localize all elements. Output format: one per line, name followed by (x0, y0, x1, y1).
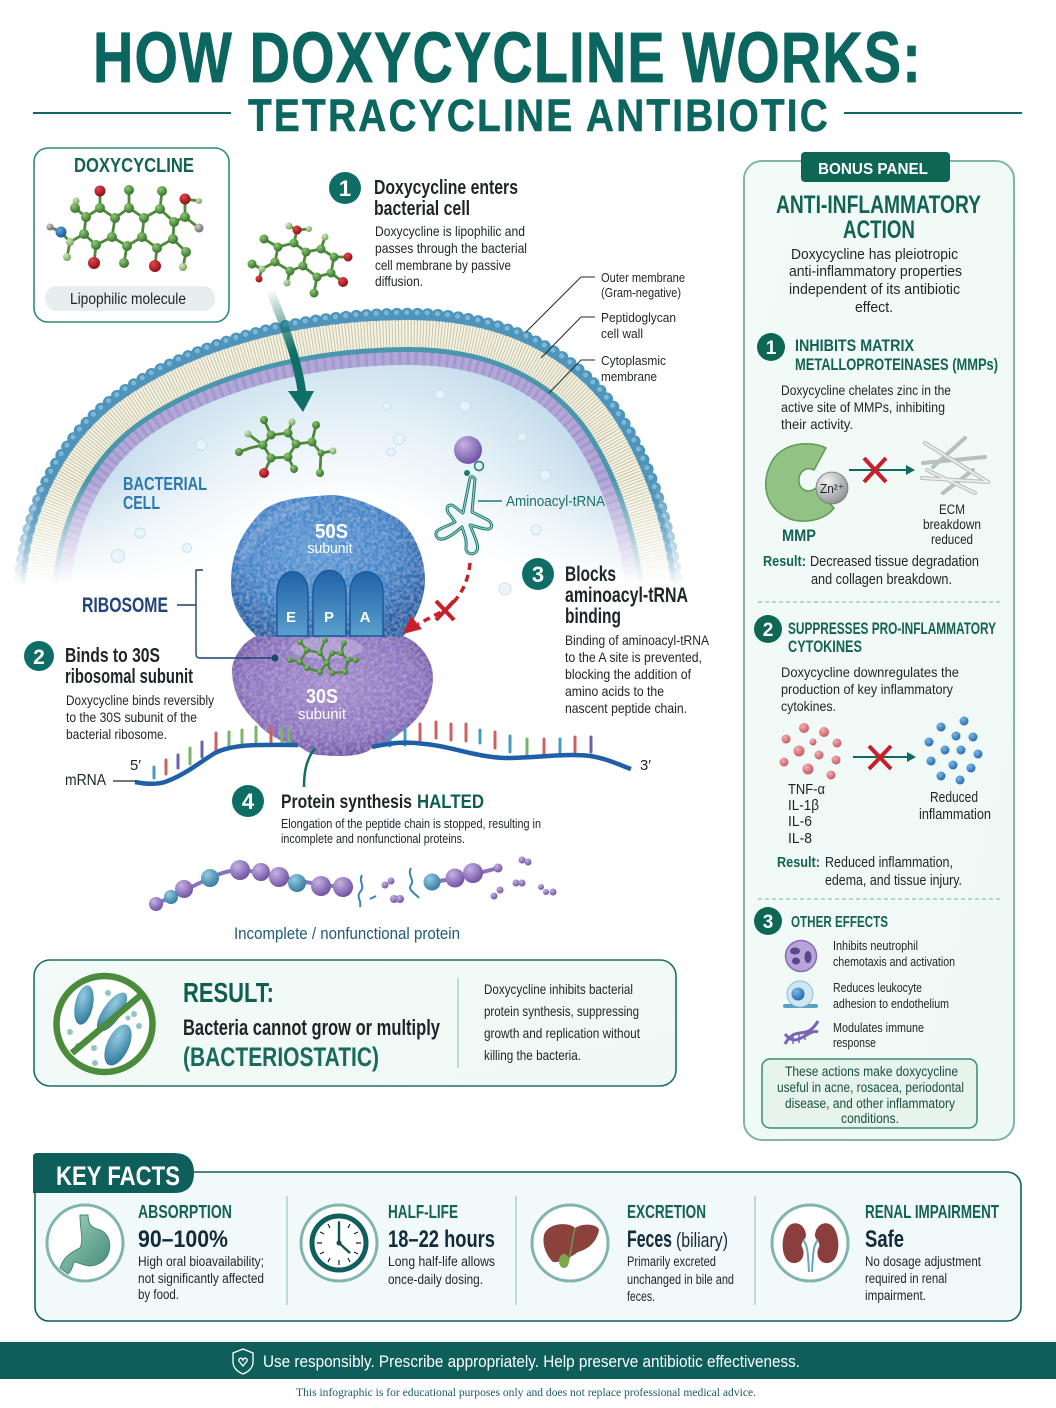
text: MMP result: Decreased tissue degradation (810, 554, 979, 570)
label: reduced inflammation (919, 790, 991, 823)
step 3: blocks aminoacyl-tRNA binding: aminoacyl-tRNA (565, 584, 688, 607)
text: neutrophil effect: Inhibits neutrophil (833, 939, 918, 953)
section 2: suppresses cytokines: CYTOKINES (788, 638, 862, 656)
step 3: blocks aminoacyl-tRNA binding: Binding of aminoacyl-tRNA (565, 632, 710, 648)
fact: half-life: HALF-LIFE (388, 1202, 458, 1222)
chart: incomplete peptide chain (149, 856, 556, 911)
text: result explanation: killing the bacteria. (484, 1047, 581, 1063)
step 1: doxycycline enters bacterial cell: Doxycycline enters (374, 177, 518, 199)
text: immune effect: response (833, 1036, 876, 1050)
step 1: doxycycline enters bacterial cell: diffusion. (375, 273, 423, 289)
icon: reduced cytokines (924, 716, 982, 784)
step 1: doxycycline enters bacterial cell (329, 172, 527, 289)
ribosome: 30S small subunit: subunit (298, 706, 347, 723)
fact: renal impairment: Safe (865, 1226, 904, 1253)
icon: MMP enzyme with zinc (766, 444, 848, 545)
icon: aminoacyl-tRNA (436, 436, 492, 554)
badge: bonus panel (801, 152, 950, 182)
text: MMP result (763, 554, 979, 588)
step 1: doxycycline enters bacterial cell: bacterial cell (374, 198, 470, 220)
label: incomplete protein: Incomplete / nonfunctional protein (234, 924, 460, 943)
label: bacterial cell: BACTERIAL (123, 474, 207, 494)
list: cytokine names: IL-1β (788, 798, 819, 814)
membrane labels with leader lines: cell wall (601, 326, 643, 341)
callout: clinical uses: disease, and other inflammatory (785, 1096, 955, 1111)
section 1: inhibits MMPs (757, 333, 998, 432)
heading: result statement: RESULT: (183, 977, 274, 1008)
fact: renal impairment: impairment. (865, 1288, 926, 1303)
text: result explanation: growth and replication without (484, 1025, 640, 1041)
heading: anti-inflammatory action: ANTI-INFLAMMATORY (776, 191, 981, 219)
icon: leukocyte on endothelium (783, 981, 818, 1008)
fact: half-life: 18–22 hours (388, 1226, 495, 1253)
icon: doxycycline bound in ribosome (287, 637, 359, 676)
section 2: suppresses cytokines: 2 (763, 620, 773, 641)
step 1: doxycycline enters bacterial cell: 1 (339, 176, 351, 201)
text: result explanation (484, 981, 640, 1063)
text: cytokine result: Reduced inflammation, (825, 855, 953, 871)
label: reduced inflammation: Reduced (930, 790, 978, 806)
step 2: binds to 30S ribosomal subunit: to the 30S subunit of the (66, 709, 197, 725)
membrane labels with leader lines: Cytoplasmic (601, 353, 666, 368)
text: responsible use: Use responsibly. Prescribe appropriately. Help preserve antibiotic effectiveness. (263, 1352, 800, 1371)
label: bacterial cell (123, 474, 207, 513)
fact: half-life (388, 1202, 495, 1287)
callout: clinical uses (762, 1059, 977, 1128)
ribosome: 50S large subunit: subunit (308, 540, 353, 557)
icon: neutrophil (786, 940, 816, 972)
text: MMP result: and collagen breakdown. (811, 572, 952, 588)
icon: doxycycline molecule inside cell (235, 416, 336, 478)
icon: doxycycline ball-and-stick (46, 185, 204, 272)
step 4: protein synthesis halted (232, 748, 541, 846)
text: neutrophil effect (833, 939, 955, 969)
badge: lipophilic molecule (45, 286, 215, 311)
step 1: doxycycline enters bacterial cell: Doxycycline is lipophilic and (375, 223, 525, 239)
fact: renal impairment: required in renal (865, 1271, 947, 1286)
badge: bonus panel: BONUS PANEL (818, 161, 928, 178)
icon: liver (532, 1205, 608, 1281)
icon: shield with heart (233, 1349, 253, 1374)
heading: result statement (183, 977, 441, 1072)
membrane labels with leader lines: Outer membrane (601, 270, 685, 285)
list: cytokine names: TNF-α (788, 782, 825, 798)
membrane labels with leader lines (526, 270, 685, 393)
label: mRNA and 5 prime end: 5′ (130, 757, 141, 774)
step 2: binds to 30S ribosomal subunit: ribosomal subunit (65, 665, 193, 688)
label: mRNA and 5 prime end: mRNA (65, 772, 107, 789)
arrow: blocked cytokine production (853, 746, 916, 769)
fact: excretion: feces. (627, 1289, 655, 1304)
icon: doxycycline molecule outside cell (248, 222, 352, 298)
panel: doxycycline molecule (34, 148, 229, 322)
fact: excretion: unchanged in bile and (627, 1272, 734, 1287)
membrane labels with leader lines: (Gram-negative) (601, 285, 681, 300)
ribosome: 50S large subunit: E (286, 609, 296, 626)
label: aminoacyl-tRNA: Aminoacyl-tRNA (506, 494, 605, 510)
icon: ECM fibers (922, 438, 988, 493)
section 1: inhibits MMPs: 1 (766, 338, 777, 359)
step 1: doxycycline enters bacterial cell: cell membrane by passive (375, 257, 511, 273)
step 4: protein synthesis halted: Protein synthesis (281, 791, 412, 813)
text: neutrophil effect: chemotaxis and activation (833, 955, 955, 969)
text: cytokine result (777, 855, 962, 889)
section 3: other effects (754, 907, 888, 935)
heading: anti-inflammatory action (776, 191, 981, 244)
label: ribosome with bracket: RIBOSOME (82, 594, 168, 617)
icon: stomach (47, 1205, 123, 1281)
fact: absorption: by food. (138, 1287, 179, 1302)
section 1: inhibits MMPs: their activity. (781, 416, 853, 432)
text: intro: anti-inflammatory properties (789, 263, 962, 280)
text: cytokine result: Result: (777, 855, 820, 871)
fact: excretion: EXCRETION (627, 1202, 706, 1222)
text: immune effect: Modulates immune (833, 1021, 924, 1035)
callout: clinical uses: These actions make doxycycline (785, 1064, 958, 1079)
text: result explanation: Doxycycline inhibits bacterial (484, 981, 633, 997)
section 1: inhibits MMPs: active site of MMPs, inhibiting (781, 399, 945, 415)
panel: result bacteriostatic (34, 960, 676, 1086)
text: immune effect (833, 1021, 924, 1050)
step 3: blocks aminoacyl-tRNA binding: blocking the addition of (565, 666, 691, 682)
heading: anti-inflammatory action: ACTION (843, 216, 915, 244)
fact: absorption: High oral bioavailability; (138, 1254, 264, 1269)
fact: excretion (627, 1202, 734, 1304)
disclaimer: This infographic is for educational purposes only and does not replace professional medical advice. (296, 1387, 756, 1399)
text: leukocyte effect: Reduces leukocyte (833, 981, 922, 995)
callout: clinical uses: useful in acne, rosacea, periodontal (777, 1080, 964, 1095)
heading: result statement: Bacteria cannot grow or multiply (183, 1015, 441, 1040)
ribosome: 50S large subunit (231, 495, 425, 637)
callout: clinical uses: conditions. (841, 1111, 899, 1126)
step 3: blocks aminoacyl-tRNA binding: binding (565, 605, 621, 628)
ribosome: 50S large subunit: 50S (315, 521, 348, 543)
ribosome: 50S large subunit: P (324, 609, 334, 626)
section 2: suppresses cytokines (754, 615, 996, 714)
text: intro: effect. (855, 299, 893, 316)
arrow: blocked tRNA path (403, 563, 470, 634)
heading: doxycycline: DOXYCYCLINE (74, 155, 194, 177)
fact: absorption (138, 1202, 264, 1302)
section 2: suppresses cytokines: Doxycycline downregulates the (781, 664, 959, 680)
label: reduced inflammation: inflammation (919, 807, 991, 823)
list: cytokine names (788, 782, 825, 847)
text: MMP result: Result: (763, 554, 806, 570)
fact: excretion: Feces (627, 1226, 672, 1253)
icon: kidneys (772, 1205, 848, 1281)
text: leukocyte effect: adhesion to endothelium (833, 997, 949, 1011)
step 3: blocks aminoacyl-tRNA binding: to the A site is prevented, (565, 649, 702, 665)
label: bacterial cell: CELL (123, 493, 160, 513)
text: leukocyte effect (833, 981, 949, 1011)
step 4: protein synthesis halted: incomplete and nonfunctional proteins. (281, 832, 465, 846)
panel: bonus anti-inflammatory action (744, 152, 1014, 1140)
icon: MMP enzyme with zinc: MMP (782, 526, 816, 545)
fact: renal impairment: No dosage adjustment (865, 1254, 981, 1269)
fact: absorption: not significantly affected (138, 1271, 264, 1286)
heading: result statement: (BACTERIOSTATIC) (183, 1042, 379, 1072)
membrane labels with leader lines: membrane (601, 369, 657, 384)
mRNA strand with bases (135, 722, 631, 784)
label: ECM breakdown reduced: breakdown (923, 517, 981, 532)
icon: clock (301, 1205, 377, 1281)
section 3: other effects: OTHER EFFECTS (791, 914, 888, 931)
heading: key facts tab (33, 1153, 194, 1193)
subtitle with side rules: TETRACYCLINE ANTIBIOTIC (248, 90, 830, 141)
step 4: protein synthesis halted: HALTED (417, 791, 484, 813)
icon: DNA helix (785, 1021, 818, 1044)
ribosome: 50S large subunit: A (360, 609, 371, 626)
fact: half-life: once-daily dosing. (388, 1272, 483, 1287)
text: intro: Doxycycline has pleiotropic (791, 246, 958, 263)
label: ECM breakdown reduced: reduced (931, 532, 973, 547)
fact: absorption: 90–100% (138, 1226, 228, 1253)
step 2: binds to 30S ribosomal subunit (24, 641, 214, 742)
step 3: blocks aminoacyl-tRNA binding: Blocks (565, 563, 616, 586)
label: ECM breakdown reduced: ECM (939, 502, 965, 517)
arrow: blocked MMP action (849, 458, 915, 482)
list: cytokine names: IL-6 (788, 814, 812, 830)
fact: half-life: Long half-life allows (388, 1254, 495, 1269)
label: ribosome with bracket (82, 570, 278, 662)
text: result explanation: protein synthesis, suppressing (484, 1003, 639, 1019)
section 1: inhibits MMPs: INHIBITS MATRIX (795, 336, 915, 355)
step 3: blocks aminoacyl-tRNA binding (522, 558, 710, 716)
icon: MMP enzyme with zinc: Zn²⁺ (820, 481, 844, 496)
section 1: inhibits MMPs: Doxycycline chelates zinc in the (781, 382, 951, 398)
fact: renal impairment: RENAL IMPAIRMENT (865, 1202, 999, 1222)
list: cytokine names: IL-8 (788, 831, 812, 847)
label: 3 prime end: 3′ (640, 757, 651, 774)
ribosome: 30S small subunit (232, 633, 433, 756)
step 4: protein synthesis halted: Elongation of the peptide chain is stopped, resulting in (281, 817, 541, 831)
fact: excretion: (biliary) (676, 1230, 728, 1252)
icon: pro-inflammatory cytokines (780, 723, 842, 780)
arrow: entry through membrane (270, 290, 314, 412)
step 3: blocks aminoacyl-tRNA binding: amino acids to the (565, 683, 664, 699)
step 2: binds to 30S ribosomal subunit: Doxycycline binds reversibly (66, 692, 214, 708)
step 1: doxycycline enters bacterial cell: passes through the bacterial (375, 240, 527, 256)
heading: key facts tab: KEY FACTS (56, 1161, 180, 1191)
section 1: inhibits MMPs: METALLOPROTEINASES (MMPs) (795, 355, 998, 374)
label: ECM breakdown reduced (923, 502, 981, 547)
ribosome: 30S small subunit: 30S (306, 686, 338, 708)
label: mRNA and 5 prime end (65, 757, 141, 789)
section 2: suppresses cytokines: production of key inflammatory (781, 681, 953, 697)
section 2: suppresses cytokines: cytokines. (781, 698, 836, 714)
step 2: binds to 30S ribosomal subunit: 2 (33, 646, 45, 669)
panel: key facts (33, 1153, 1021, 1321)
step 2: binds to 30S ribosomal subunit: Binds to 30S (65, 644, 160, 667)
step 3: blocks aminoacyl-tRNA binding: nascent peptide chain. (565, 700, 687, 716)
section 3: other effects: 3 (763, 912, 773, 933)
fact: renal impairment (865, 1202, 999, 1303)
text: cytokine result: edema, and tissue injury. (825, 873, 962, 889)
fact: excretion: Primarily excreted (627, 1254, 716, 1269)
step 4: protein synthesis halted: 4 (242, 789, 255, 814)
step 3: blocks aminoacyl-tRNA binding: 3 (532, 562, 544, 587)
step 2: binds to 30S ribosomal subunit: bacterial ribosome. (66, 726, 167, 742)
bacterial cell envelope and cytoplasm (14, 308, 682, 596)
badge: lipophilic molecule: Lipophilic molecule (70, 291, 186, 308)
icon: no bacteria (56, 975, 154, 1073)
text: intro: independent of its antibiotic (789, 281, 960, 298)
fact: absorption: ABSORPTION (138, 1202, 232, 1222)
text: intro (789, 246, 962, 316)
membrane labels with leader lines: Peptidoglycan (601, 310, 676, 325)
footer banner (0, 1342, 1056, 1379)
